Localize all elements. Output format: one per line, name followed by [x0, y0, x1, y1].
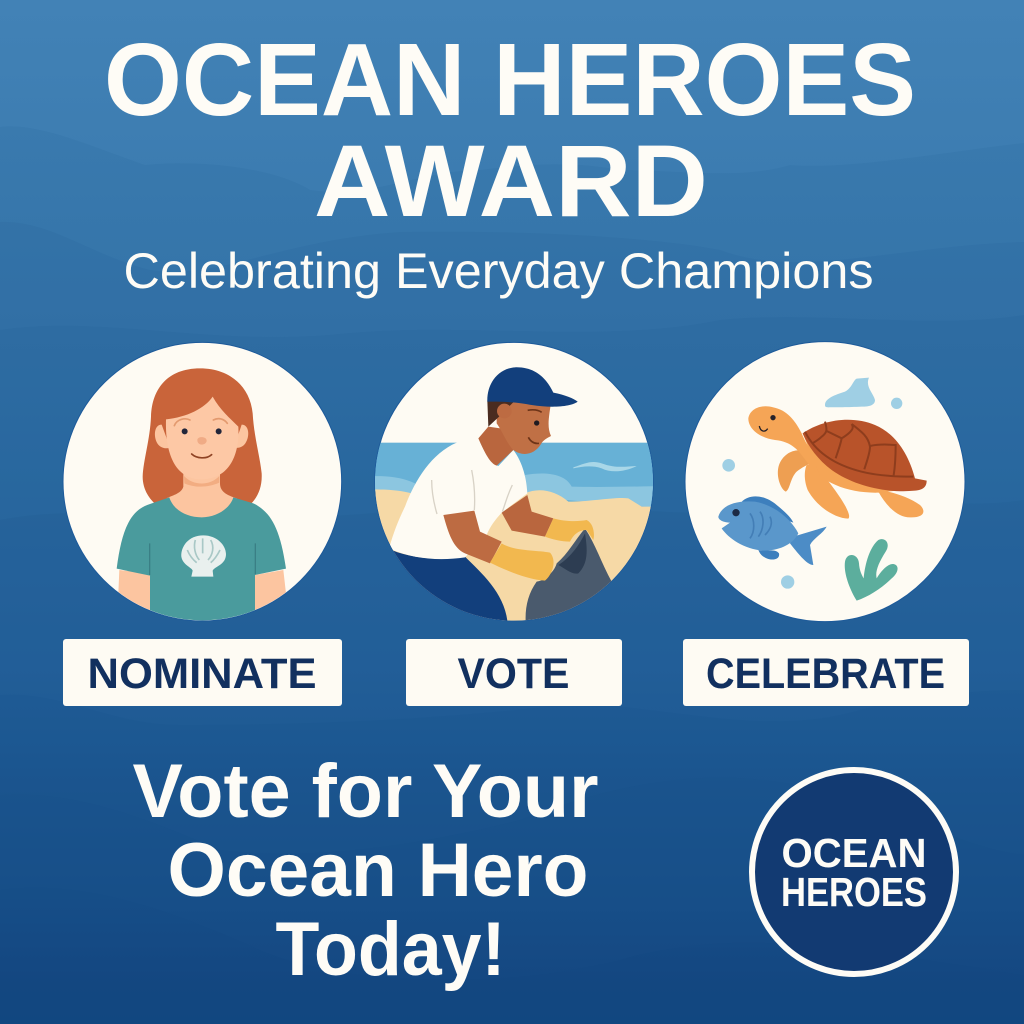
shallow water: [375, 474, 653, 507]
ears: [155, 425, 248, 448]
badge: ocean heroes: [752, 770, 956, 974]
title: AWARD: [314, 124, 708, 238]
neck: [478, 427, 513, 466]
sea turtle: [748, 406, 927, 519]
shirt folds: [432, 470, 512, 514]
hair: [143, 368, 262, 505]
ear: [497, 404, 510, 416]
panel: celebrate illustration: [685, 342, 965, 622]
label: celebrate: CELEBRATE: [706, 650, 945, 698]
face: [166, 397, 239, 479]
panel: nominate illustration: [63, 342, 342, 622]
pants: [393, 550, 508, 620]
smile: [192, 454, 212, 458]
teal shirt: [117, 497, 286, 622]
call to action: Ocean Hero: [168, 828, 588, 913]
subtitle: Celebrating Everyday Champions: [124, 243, 874, 299]
seaweed: [845, 539, 898, 601]
bag opening: [558, 533, 587, 574]
cap: [487, 367, 578, 407]
sleeve seams: [150, 543, 255, 575]
arms: [118, 570, 286, 613]
sea: [365, 443, 665, 509]
eye and smile: [528, 410, 542, 443]
badge: ocean heroes: HEROES: [781, 869, 927, 915]
title: [104, 22, 916, 238]
back arm: [502, 495, 553, 537]
call to action: Vote for Your: [132, 749, 598, 834]
label: vote: [406, 639, 622, 706]
call to action: [132, 749, 598, 992]
trash bag: [526, 528, 612, 622]
debris and bubbles: [722, 378, 902, 589]
sand: [375, 489, 651, 621]
head: [497, 398, 552, 454]
label: vote: VOTE: [458, 650, 570, 698]
eyes: [182, 428, 222, 434]
nose: [197, 437, 207, 445]
shell emblem: [181, 535, 226, 577]
neck and chest: [166, 474, 236, 518]
label: nominate: [63, 639, 342, 706]
white shirt: [389, 438, 527, 559]
gloves: [490, 518, 594, 581]
hair: [487, 401, 515, 427]
front arm: [443, 511, 502, 563]
panel: vote illustration: [365, 342, 665, 630]
call to action: Today!: [276, 907, 506, 992]
blue fish: [718, 496, 827, 565]
badge: ocean heroes: OCEAN: [782, 830, 926, 876]
label: nominate: NOMINATE: [88, 650, 316, 698]
label: celebrate: [683, 639, 969, 706]
neck shadow: [184, 476, 219, 487]
wave crest: [573, 462, 637, 471]
title: OCEAN HEROES: [104, 22, 916, 137]
eyebrows: [174, 419, 227, 426]
